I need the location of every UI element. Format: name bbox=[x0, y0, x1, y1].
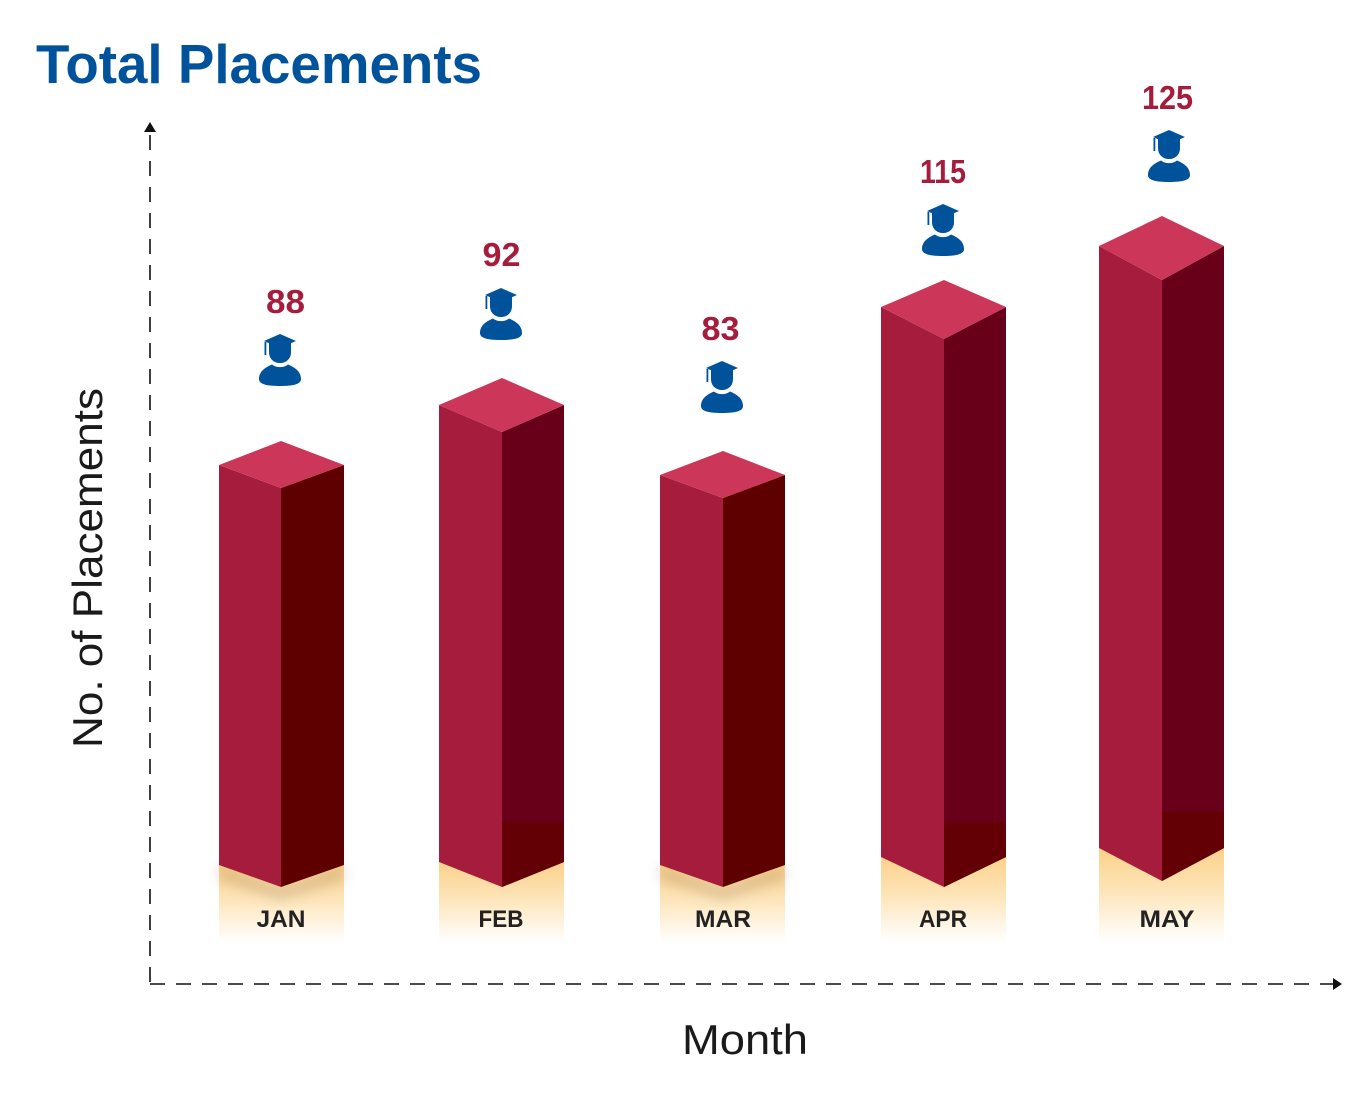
value: 83: 83 bbox=[702, 310, 740, 347]
icon: graduate APR bbox=[922, 204, 964, 256]
y-axis bbox=[144, 122, 156, 984]
y-axis label: No. of Placements bbox=[64, 388, 111, 748]
bar: JAN bbox=[219, 441, 344, 942]
month label: APR: APR bbox=[919, 906, 967, 933]
icon: graduate MAR bbox=[701, 361, 743, 413]
bar: APR bbox=[881, 280, 1006, 942]
month label: JAN: JAN bbox=[256, 906, 306, 933]
bar: MAR bbox=[660, 451, 785, 942]
value: 115: 115 bbox=[920, 153, 966, 190]
value: 92: 92 bbox=[482, 236, 520, 273]
icon: graduate FEB bbox=[480, 288, 522, 340]
bar: MAY bbox=[1099, 216, 1224, 942]
bar: FEB bbox=[439, 378, 564, 942]
icon: graduate JAN bbox=[259, 334, 301, 386]
month label: MAY: MAY bbox=[1140, 906, 1194, 933]
month label: FEB: FEB bbox=[478, 906, 524, 933]
x-axis bbox=[150, 978, 1342, 990]
month label: MAR: MAR bbox=[695, 906, 751, 933]
value: 88: 88 bbox=[266, 283, 305, 320]
x-axis label: Month bbox=[682, 1016, 808, 1063]
icon: graduate MAY bbox=[1148, 130, 1190, 182]
title: Total Placements bbox=[36, 33, 482, 95]
value: 125: 125 bbox=[1142, 79, 1193, 116]
